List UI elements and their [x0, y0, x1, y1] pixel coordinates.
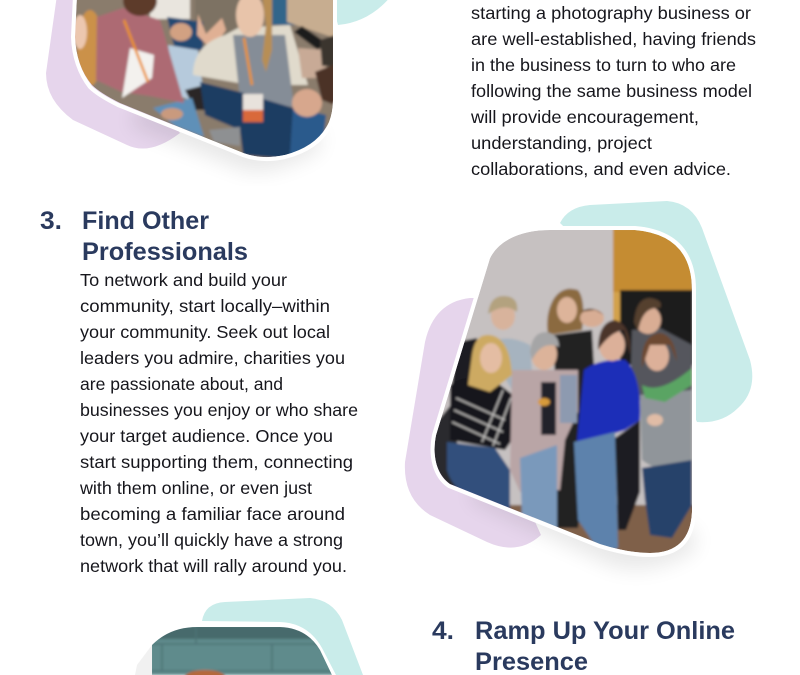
text block: intro continuation: understanding, project	[471, 133, 652, 153]
text block: step 3 body: your target audience. Once you	[80, 426, 333, 446]
text block: step 3 body: network that will rally around you.	[80, 556, 347, 576]
text block: step 3 body	[79, 270, 358, 576]
panel: bottom photo collage	[135, 598, 363, 675]
text block: intro continuation: following the same business model	[471, 81, 752, 101]
text block: intro continuation: are well-established, having friends	[471, 29, 756, 49]
heading: step 3: Find Other	[82, 207, 209, 235]
shadow under group photo	[470, 480, 695, 569]
text block: step 3 body: with them online, or even just	[79, 478, 312, 498]
text block: intro continuation: collaborations, and even advice.	[471, 159, 731, 179]
shape: mint blob behind bottom photo	[202, 598, 363, 675]
heading: step 4	[432, 617, 735, 675]
text block: step 3 body: town, you’ll quickly have a strong	[80, 530, 343, 550]
text block: step 3 body: businesses you enjoy or who share	[80, 400, 358, 420]
shape: mint blob behind group photo	[560, 201, 752, 422]
shadow beside bottom photo	[135, 645, 152, 675]
photo: conference group	[70, 0, 340, 165]
heading: step 3: Professionals	[82, 238, 248, 266]
photo border: top	[73, 0, 335, 159]
shape: mint blob behind top photo	[330, 0, 392, 25]
text block: intro continuation: will provide encouragement,	[470, 107, 699, 127]
text block: step 3 body: start supporting them, connecting	[80, 452, 353, 472]
photo: women group	[430, 225, 695, 560]
text block: step 3 body: leaders you admire, charities you	[80, 348, 345, 368]
text block: step 3 body: your community. Seek out local	[80, 322, 330, 342]
shape: lilac blob behind group photo	[405, 298, 541, 548]
heading: step 3: 3.	[40, 207, 62, 235]
text block: intro continuation: starting a photography business or	[471, 3, 751, 23]
text block: step 3 body: To network and build your	[80, 270, 287, 290]
panel: top photo collage	[46, 0, 392, 172]
text block: intro continuation: in the business to turn to who are	[471, 55, 736, 75]
heading: step 4: Ramp Up Your Online	[475, 617, 735, 645]
photo: brick wall portrait	[150, 625, 335, 675]
heading: step 4: 4.	[432, 617, 454, 645]
photo border: group	[433, 228, 694, 555]
shadow under top photo	[130, 105, 320, 172]
heading: step 3	[40, 207, 248, 266]
panel: group photo collage	[405, 201, 752, 569]
shape: lilac blob behind top photo	[46, 0, 180, 149]
text block: step 3 body: becoming a familiar face around	[80, 504, 345, 524]
text block: step 3 body: community, start locally–within	[80, 296, 330, 316]
text block: intro continuation	[470, 3, 756, 179]
text block: step 3 body: are passionate about, and	[80, 374, 283, 394]
